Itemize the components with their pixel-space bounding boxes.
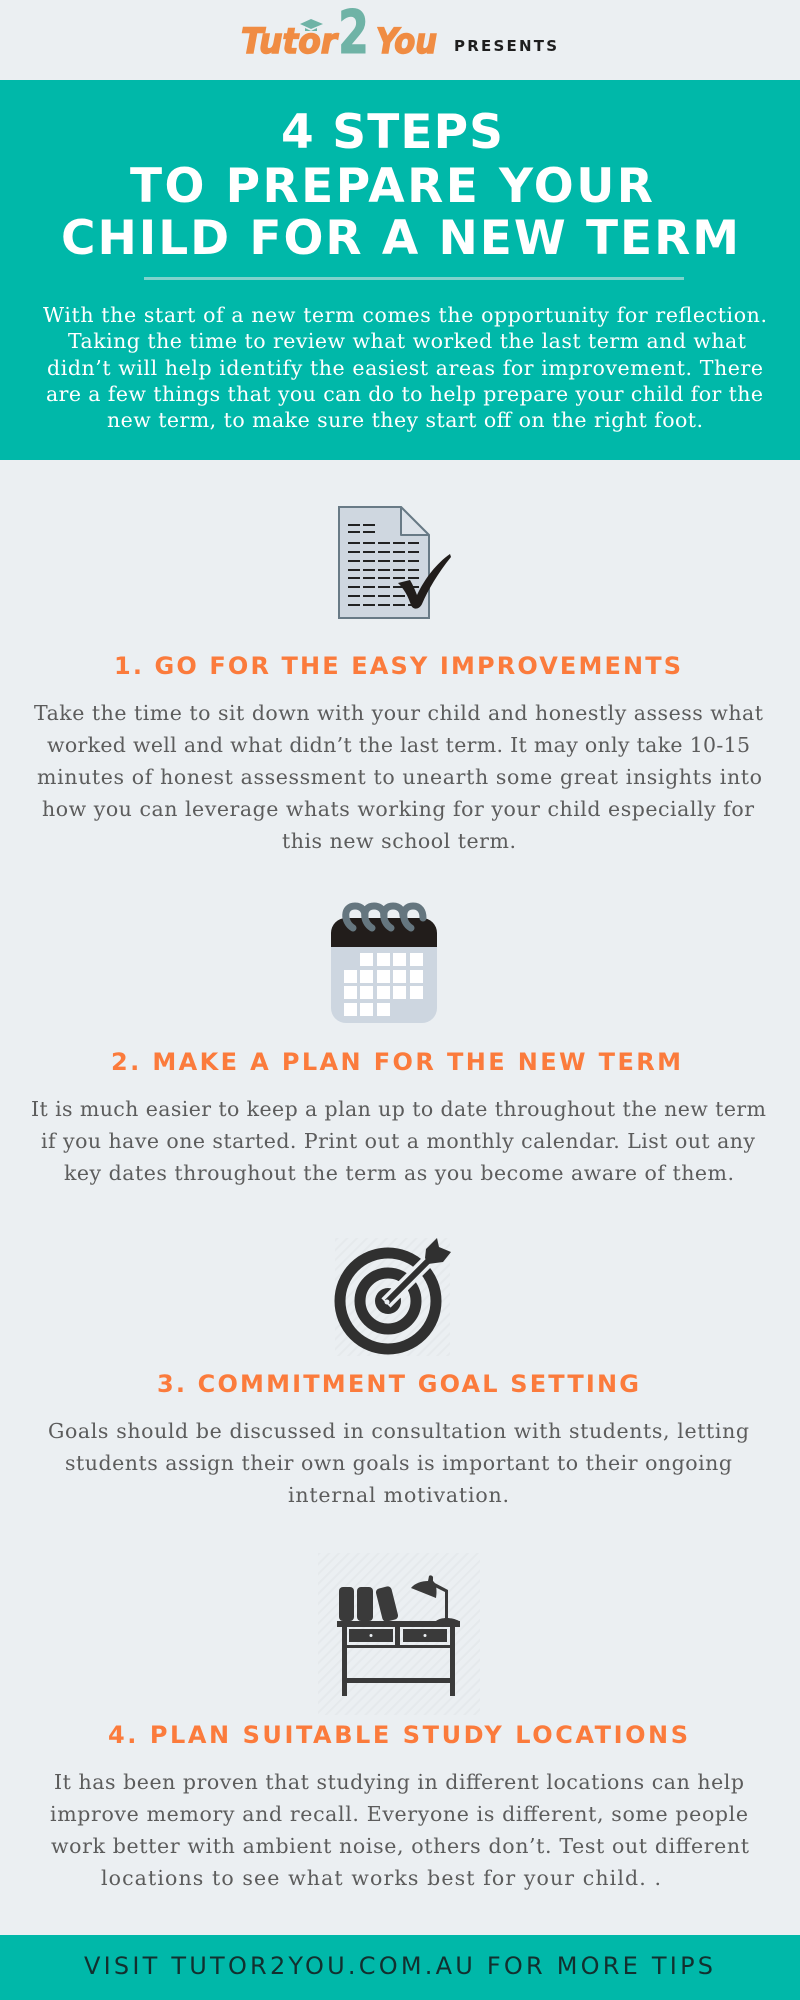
- icon: desk with books and lamp: [318, 1553, 480, 1715]
- panel: teal header: [0, 80, 800, 460]
- body 1: worked well and what didn’t the last term. It may only take 10-15: [47, 733, 750, 757]
- title: 4 STEPS: [281, 105, 503, 160]
- step 2: [31, 906, 766, 1185]
- body 2: [31, 1097, 766, 1185]
- icon: target with arrow: [335, 1238, 451, 1356]
- step 1: [34, 507, 764, 853]
- body 1: Take the time to sit down with your child and honestly assess what: [34, 701, 764, 725]
- logo: Tutor2You presents: Tutor: [241, 22, 340, 62]
- body 1: this new school term.: [282, 829, 516, 853]
- body 4: locations to see what works best for your child. .: [101, 1866, 661, 1890]
- intro text: new term, to make sure they start off on the right foot.: [107, 408, 703, 432]
- heading 3: 3. COMMITMENT GOAL SETTING: [157, 1370, 639, 1398]
- body 2: if you have one started. Print out a monthly calendar. List out any: [41, 1129, 755, 1153]
- body 3: Goals should be discussed in consultation with students, letting: [48, 1419, 749, 1443]
- title: CHILD FOR A NEW TERM: [61, 211, 739, 266]
- footer band: VISIT TUTOR2YOU.COM.AU FOR MORE TIPS: [84, 1952, 713, 1980]
- body 4: improve memory and recall. Everyone is different, some people: [50, 1802, 748, 1826]
- body 1: how you can leverage whats working for your child especially for: [42, 797, 754, 821]
- heading 4: 4. PLAN SUITABLE STUDY LOCATIONS: [108, 1721, 688, 1749]
- intro text: [43, 303, 767, 432]
- title: [61, 105, 739, 266]
- icon: document with checkmark: [339, 507, 451, 618]
- body 3: internal motivation.: [288, 1483, 509, 1507]
- body 4: It has been proven that studying in different locations can help: [54, 1770, 744, 1794]
- logo: Tutor2You presents: 2: [338, 0, 369, 68]
- heading 1: 1. GO FOR THE EASY IMPROVEMENTS: [114, 652, 681, 680]
- body 2: key dates throughout the term as you become aware of them.: [64, 1161, 734, 1185]
- intro text: are a few things that you can do to help prepare your child for the: [46, 382, 763, 406]
- body 3: [48, 1419, 749, 1507]
- intro text: With the start of a new term comes the opportunity for reflection.: [43, 303, 767, 327]
- body 4: [50, 1770, 750, 1890]
- body 2: It is much easier to keep a plan up to date throughout the new term: [31, 1097, 766, 1121]
- heading 2: 2. MAKE A PLAN FOR THE NEW TERM: [111, 1048, 681, 1076]
- body 1: [34, 701, 764, 853]
- footer band: [0, 1935, 800, 2000]
- title: TO PREPARE YOUR: [130, 159, 653, 214]
- body 3: students assign their own goals is important to their ongoing: [65, 1451, 732, 1475]
- icon: calendar: [331, 906, 437, 1023]
- logo: Tutor2You presents: You: [376, 22, 437, 62]
- step 4: [50, 1553, 750, 1890]
- body 1: minutes of honest assessment to unearth some great insights into: [37, 765, 762, 789]
- logo: Tutor2You presents: [241, 0, 557, 68]
- step 3: [48, 1238, 749, 1507]
- intro text: Taking the time to review what worked the last term and what: [68, 329, 747, 353]
- logo: Tutor2You presents: PRESENTS: [454, 37, 557, 55]
- intro text: didn’t will help identify the easiest areas for improvement. There: [47, 356, 763, 380]
- body 4: work better with ambient noise, others don’t. Test out different: [51, 1834, 750, 1858]
